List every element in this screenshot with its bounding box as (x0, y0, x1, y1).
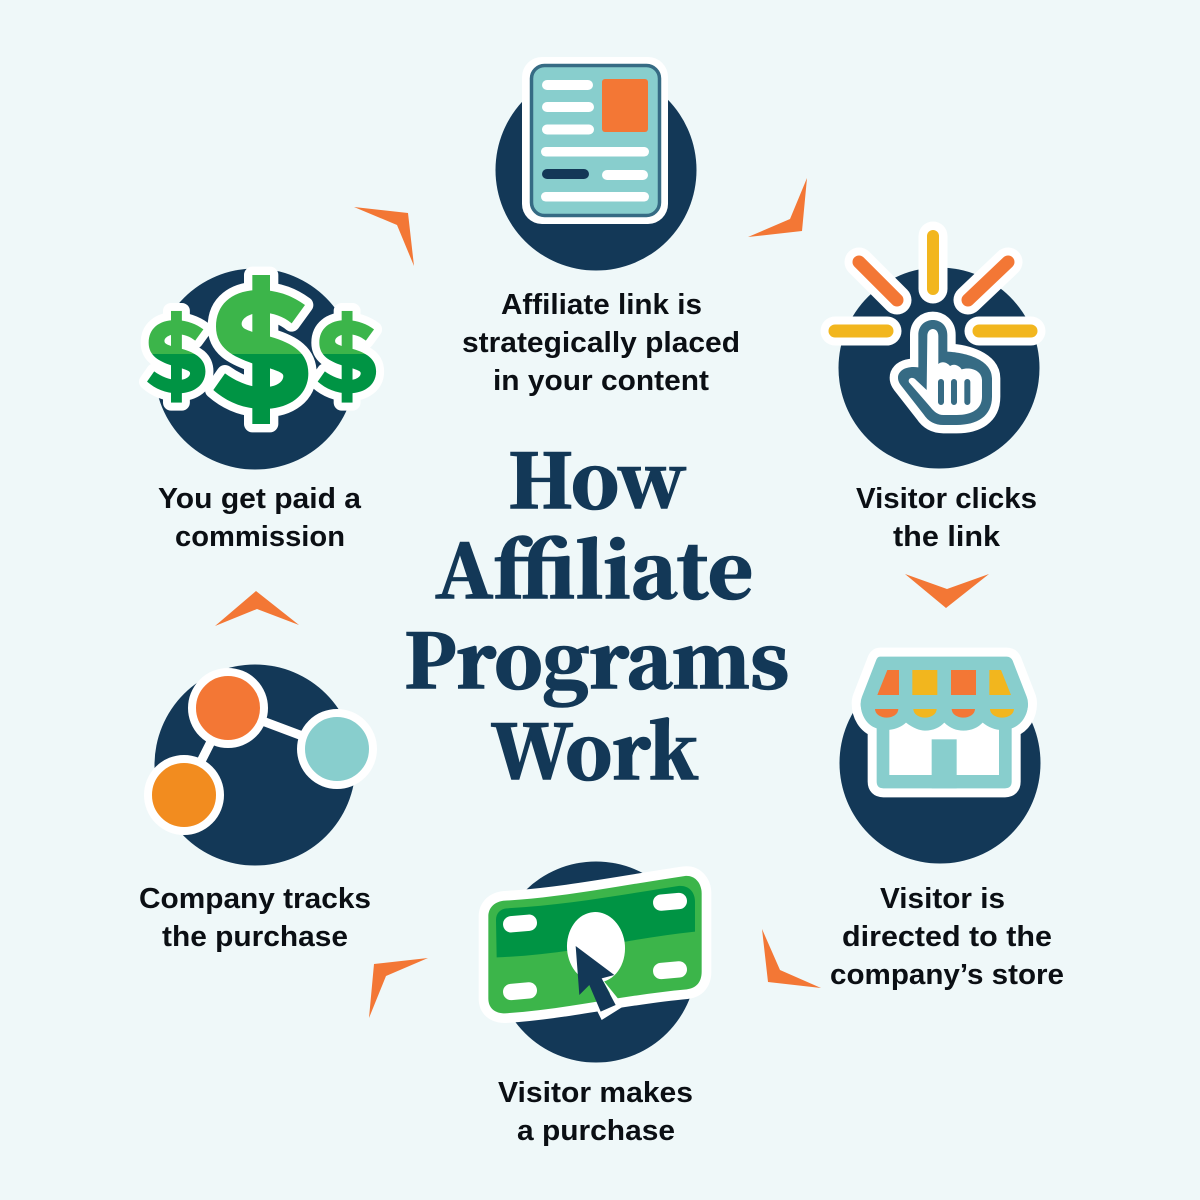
caption: step 5: the purchase (162, 921, 348, 953)
icon: article page (496, 57, 696, 270)
caption: step 3: directed to the (842, 921, 1052, 953)
icon: banknote and cursor (488, 862, 702, 1062)
step 6: commission (147, 268, 376, 553)
icon: tracking nodes (148, 664, 373, 866)
caption: step 3 (830, 883, 1064, 991)
title: Work (491, 695, 698, 801)
caption: step 2 (856, 483, 1037, 553)
caption: step 5 (139, 883, 371, 953)
icon: storefront (840, 657, 1040, 864)
caption: step 4: Visitor makes (498, 1077, 693, 1109)
caption: step 1 (462, 289, 740, 397)
caption: step 2: the link (893, 521, 1001, 553)
caption: step 1: strategically placed (462, 327, 740, 359)
caption: step 4 (498, 1077, 693, 1147)
caption: step 5: Company tracks (139, 883, 371, 915)
icon: clicking hand (835, 236, 1040, 468)
caption: step 1: in your content (493, 365, 709, 397)
caption: step 6: You get paid a (158, 483, 362, 515)
caption: step 1: Affiliate link is (501, 289, 702, 321)
caption: step 3: company’s store (830, 959, 1064, 991)
arrow: step 1 to 2 (748, 178, 807, 237)
icon: dollar signs (147, 268, 376, 470)
title: Programs (404, 604, 789, 710)
title (404, 424, 789, 801)
step 3: company store (830, 657, 1064, 991)
caption: step 6: commission (175, 521, 345, 553)
caption: step 3: Visitor is (880, 883, 1005, 915)
arrow: step 5 to 6 (215, 591, 299, 626)
title: How (508, 424, 686, 530)
caption: step 4: a purchase (517, 1115, 675, 1147)
caption: step 2: Visitor clicks (856, 483, 1037, 515)
step 4: visitor purchases (488, 862, 702, 1147)
arrow: step 6 to 1 (354, 207, 414, 266)
step 5: company tracks (139, 664, 373, 953)
arrow: step 2 to 3 (905, 574, 989, 608)
arrow: step 3 to 4 (762, 929, 821, 988)
arrow: step 4 to 5 (369, 958, 428, 1018)
title: Affiliate (435, 514, 753, 620)
caption: step 6 (158, 483, 362, 553)
step 2: visitor clicks (835, 236, 1040, 553)
step 1: affiliate link placed (462, 57, 740, 397)
